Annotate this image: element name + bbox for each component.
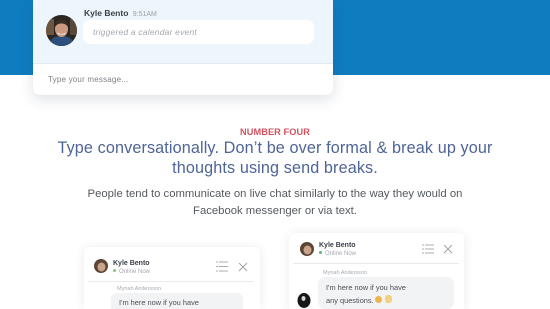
icon: wave emoji [385,295,392,303]
visitor avatar [298,293,310,308]
body text: People tend to communicate on live chat similarly to the way they would on [88,188,462,200]
icon: smile emoji [375,296,382,303]
online status: Online Now [119,269,150,275]
divider [88,280,254,282]
message text: triggered a calendar event [93,27,197,37]
avatar [94,259,108,273]
message input placeholder: Type your message... [48,75,128,84]
message text: I'm here now if you have [326,283,406,292]
message bubble [83,20,314,44]
sender name and time: Kyle Bento 9:51AM [84,8,157,18]
sender label: Mynah Andersson [323,270,367,276]
avatar [300,242,314,256]
message bubble [111,293,243,309]
agent name: Kyle Bento [113,260,150,267]
heading: thoughts using send breaks. [172,158,378,176]
label: number four: NUMBER FOUR [240,127,310,137]
divider [293,262,459,264]
sender label: Mynah Andersson [117,286,161,292]
message text: any questions. [326,296,374,305]
agent name: Kyle Bento [319,242,356,249]
message text: I'm here now if you have [119,298,199,307]
body text [88,188,462,217]
panel: main chat window [33,0,333,95]
message text [326,283,406,305]
blue header band [0,0,550,75]
icon: close [444,244,452,254]
heading: Type conversationally. Don’t be over formal & break up your [57,139,493,157]
panel: left chat example [84,247,260,309]
panel: right chat example [289,233,464,309]
icon: menu [216,262,228,272]
message area [33,0,333,64]
icon: close [238,262,248,272]
online status: Online Now [325,251,356,257]
message bubble [318,277,454,309]
icon: menu [422,244,434,254]
avatar: Kyle Bento [46,15,77,46]
body text: Facebook messenger or via text. [193,205,357,217]
heading [57,139,493,176]
